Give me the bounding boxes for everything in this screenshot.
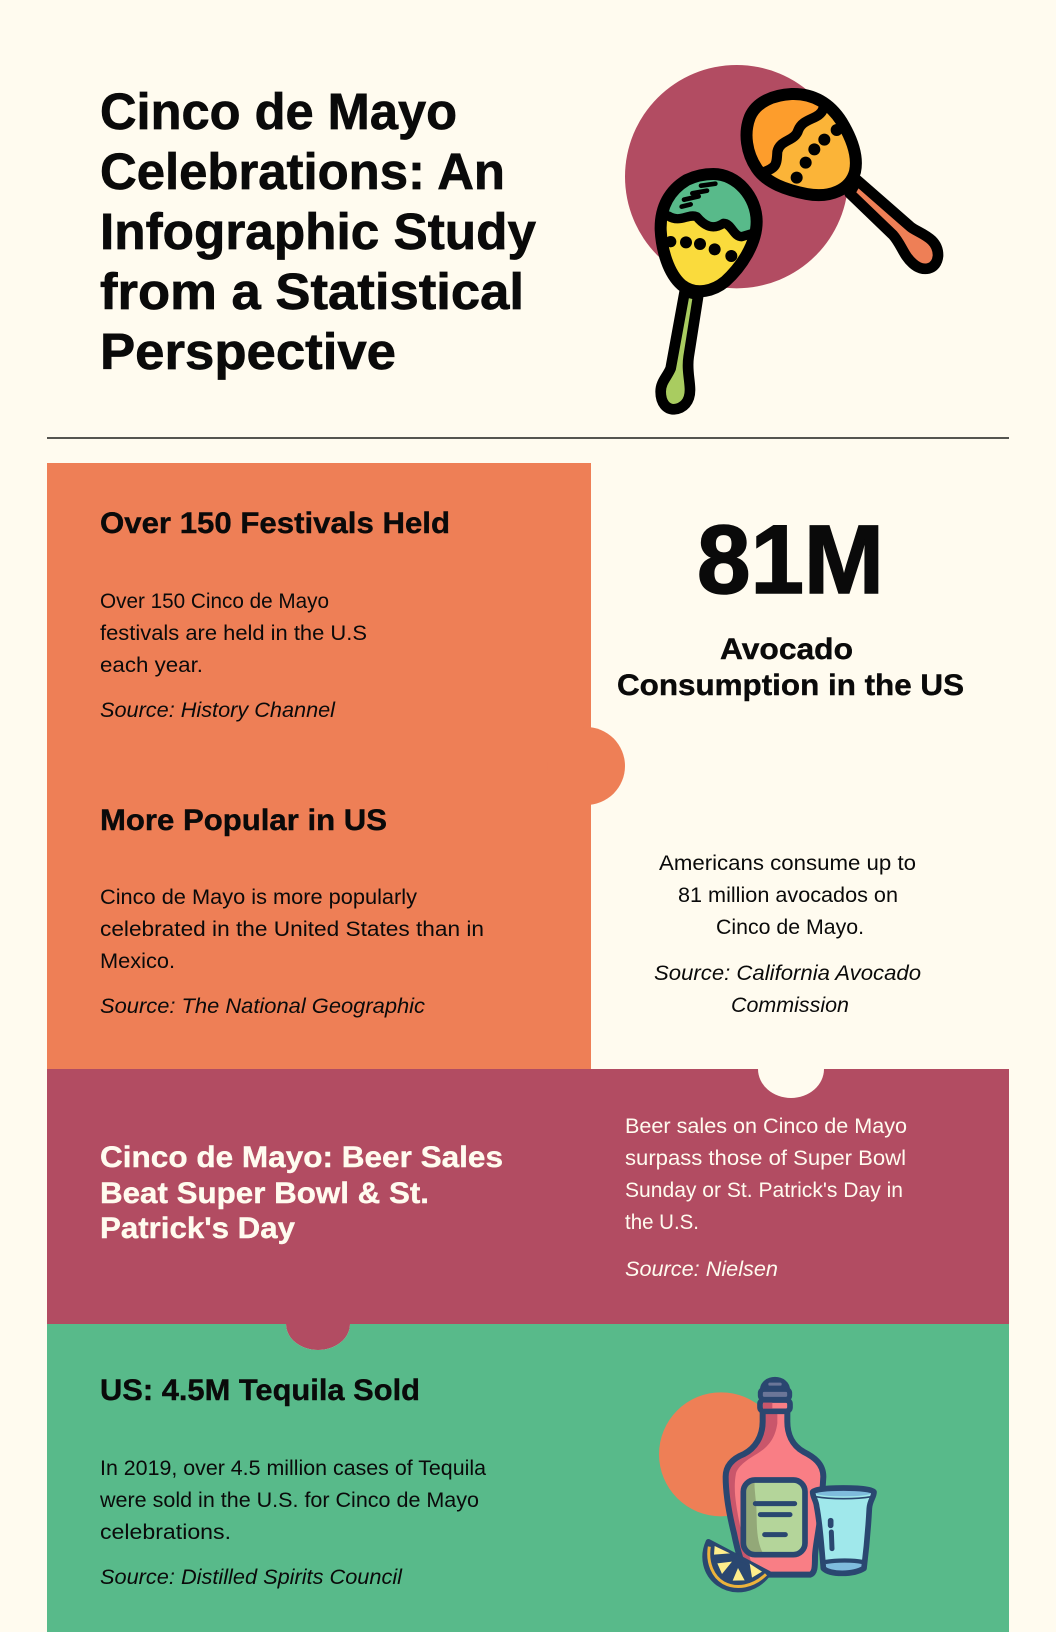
big number: 81M: 81M <box>697 505 884 614</box>
icon: bottle <box>726 1380 823 1575</box>
icon: shot glass <box>813 1488 874 1573</box>
text block: avocado details: 81 million avocados on <box>678 884 898 907</box>
heading: avocado consumption: Avocado <box>720 633 853 666</box>
icon: maracas with burgundy circle <box>625 65 938 409</box>
text block: beer sales details <box>625 1115 907 1281</box>
text block: more popular in US: More Popular in US <box>100 804 387 837</box>
heading: beer sales: Cinco de Mayo: Beer Sales <box>100 1141 503 1174</box>
title: from a Statistical <box>100 263 524 320</box>
title: Celebrations: An <box>100 143 505 200</box>
text block: avocado details: Americans consume up to <box>659 852 916 875</box>
text block: tequila sold: celebrations. <box>100 1521 231 1544</box>
text block: more popular in US: Mexico. <box>100 950 175 973</box>
text block: avocado details: Commission <box>731 994 849 1017</box>
text block: beer sales details: Beer sales on Cinco de Mayo <box>625 1115 907 1138</box>
text block: tequila sold <box>99 1374 486 1589</box>
title: Perspective <box>100 323 396 380</box>
text block: avocado details: Cinco de Mayo. <box>716 916 864 939</box>
text block: more popular in US <box>100 804 484 1018</box>
title: Infographic Study <box>100 203 537 260</box>
icon: green maraca <box>661 174 757 409</box>
panel: burgundy beer sales <box>47 1069 1009 1350</box>
title: Cinco de Mayo <box>100 83 457 140</box>
text block: over 150 festivals: Over 150 Cinco de Mayo <box>100 590 329 613</box>
icon: lemon wedge <box>705 1542 769 1590</box>
title <box>100 83 537 380</box>
text block: avocado details <box>654 852 921 1017</box>
panel: green tequila <box>47 1324 1009 1632</box>
text block: tequila sold: Source: Distilled Spirits Council <box>100 1566 403 1589</box>
icon: tequila bottle, glass and lemon <box>659 1380 874 1590</box>
text block: over 150 festivals: festivals are held in the U.S <box>100 622 367 645</box>
text block: over 150 festivals: each year. <box>100 654 203 677</box>
text block: avocado details: Source: California Avocado <box>654 962 921 985</box>
icon: orange maraca <box>747 94 938 269</box>
text block: beer sales details: the U.S. <box>625 1211 699 1234</box>
heading: beer sales: Patrick's Day <box>100 1212 295 1245</box>
text block: more popular in US: celebrated in the United States than in <box>100 918 484 941</box>
notch: cream puzzle socket <box>758 1069 824 1098</box>
text block: tequila sold: were sold in the U.S. for Cinco de Mayo <box>99 1489 479 1512</box>
text block: tequila sold: In 2019, over 4.5 million cases of Tequila <box>100 1457 486 1480</box>
text block: over 150 festivals: Source: History Channel <box>100 699 336 722</box>
text block: tequila sold: US: 4.5M Tequila Sold <box>100 1374 420 1407</box>
text block: beer sales details: surpass those of Super Bowl <box>625 1147 906 1170</box>
tab: burgundy puzzle knob <box>286 1324 350 1350</box>
text block: beer sales details: Source: Nielsen <box>625 1258 778 1281</box>
heading: beer sales: Beat Super Bowl & St. <box>100 1177 429 1210</box>
tab: orange puzzle knob <box>547 727 625 805</box>
panel: orange festivals <box>47 463 625 1069</box>
heading: beer sales <box>100 1141 503 1245</box>
text block: over 150 festivals <box>100 507 450 722</box>
text block: beer sales details: Sunday or St. Patrick's Day in <box>625 1179 903 1202</box>
heading: avocado consumption: Consumption in the US <box>617 669 964 702</box>
text block: more popular in US: Source: The National Geographic <box>100 995 426 1018</box>
divider <box>47 437 1009 439</box>
text block: more popular in US: Cinco de Mayo is more popularly <box>100 886 418 909</box>
text block: over 150 festivals: Over 150 Festivals Held <box>100 507 450 540</box>
heading: avocado consumption <box>617 633 964 702</box>
